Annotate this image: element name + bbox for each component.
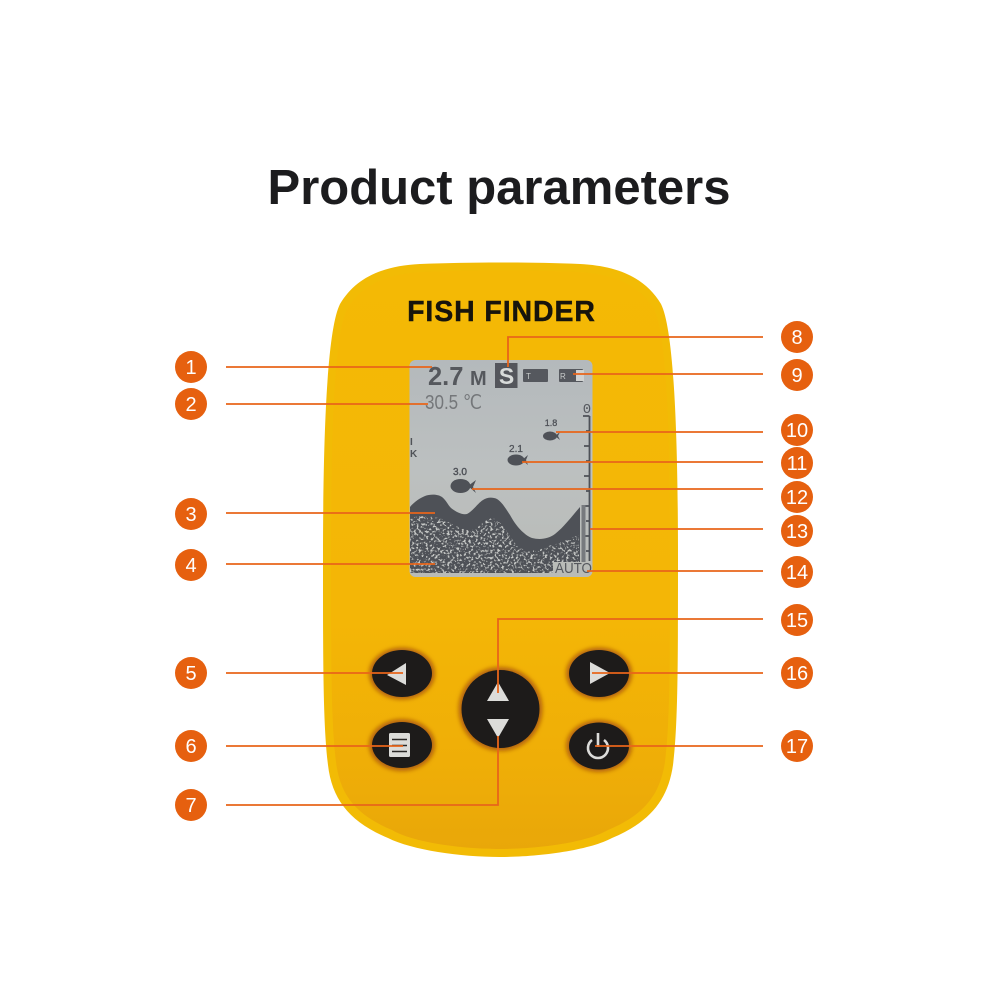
callout 3 [175, 498, 435, 530]
sensitivity icon [495, 363, 518, 389]
callout 16: 16 [786, 663, 808, 685]
button: power [566, 720, 632, 772]
callout 12: 12 [786, 487, 808, 509]
fish 2.1 [508, 444, 528, 466]
callout 15: 15 [786, 610, 808, 632]
sonar bottom terrain [410, 495, 580, 573]
title: Product parameters [268, 161, 730, 215]
callout 8 [508, 321, 813, 367]
callout 6: 6 [185, 736, 197, 758]
sensitivity icon: S [499, 363, 514, 389]
callout 3: 3 [185, 504, 197, 526]
callout 1: 1 [185, 357, 197, 379]
callout 14: 14 [786, 562, 808, 584]
callout 6 [175, 730, 403, 762]
callout 10 [556, 414, 813, 446]
callout 2 [175, 388, 428, 420]
callout 14 [587, 556, 813, 588]
LCD screen [410, 360, 592, 577]
callout 7 [175, 736, 498, 821]
callout 4 [175, 549, 435, 581]
button: right [566, 648, 632, 700]
callout 4: 4 [185, 555, 197, 577]
callout 15 [498, 604, 813, 693]
callout 16 [592, 657, 813, 689]
callout 5 [175, 657, 403, 689]
fish 2.1: 2.1 [509, 444, 523, 455]
button: menu [369, 719, 435, 771]
callout 7: 7 [185, 795, 197, 817]
callout 17 [595, 730, 813, 762]
LCD screen: K [410, 449, 418, 460]
fish 3.0 [450, 467, 476, 493]
fish 1.8 [543, 418, 560, 440]
callout 12 [472, 481, 813, 513]
brand label: FISH FINDER [407, 296, 596, 328]
AUTO label: AUTO [555, 561, 592, 577]
device body [323, 262, 678, 857]
callout 13 [590, 515, 813, 547]
callout 8: 8 [791, 327, 803, 349]
callout 10: 10 [786, 420, 808, 442]
fish 3.0: 3.0 [453, 467, 467, 478]
callout 9: 9 [791, 365, 803, 387]
callout 11 [522, 447, 813, 479]
button: up and down [458, 667, 542, 751]
depth reading: 2.7 [428, 363, 463, 391]
callout 2: 2 [185, 394, 197, 416]
LCD screen: M [470, 368, 487, 390]
callout 11: 11 [787, 453, 807, 475]
button: left [369, 648, 435, 700]
fish 1.8: 1.8 [545, 418, 557, 428]
fish alarm icon [523, 369, 548, 382]
speckled seabed [410, 515, 580, 573]
callout 5: 5 [185, 663, 197, 685]
fish alarm icon: T [526, 372, 531, 381]
battery icon [559, 369, 584, 382]
callout 13: 13 [786, 521, 808, 543]
callout 1 [175, 351, 432, 383]
callout 17: 17 [786, 736, 808, 758]
scale bar [582, 402, 591, 562]
scale bar: 0 [583, 402, 591, 418]
callout 9 [573, 359, 813, 391]
side marks: I [410, 437, 413, 448]
battery icon: R [560, 372, 566, 381]
temperature: 30.5 ℃ [425, 392, 482, 414]
